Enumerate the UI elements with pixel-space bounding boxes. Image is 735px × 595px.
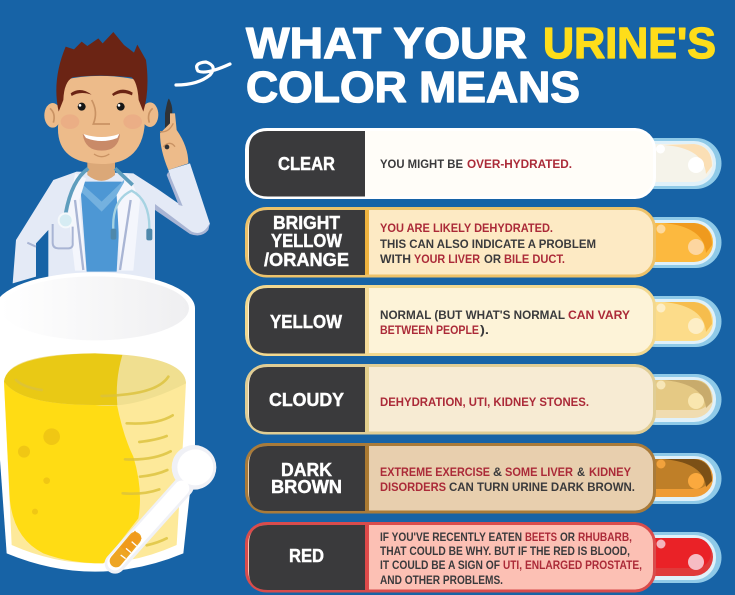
- hand and pen: [160, 99, 188, 170]
- text: yellow: ).: [480, 323, 489, 337]
- panel: red: [246, 524, 654, 591]
- cup rim: [1, 276, 189, 340]
- text: red: UTI,: [503, 558, 522, 572]
- text: red: BEETS: [525, 530, 557, 544]
- text: red: THAT COULD BE WHY. BUT IF THE RED IS BLOOD,: [380, 544, 630, 558]
- panel: clear: [246, 130, 654, 198]
- text: dark brown: [380, 465, 635, 494]
- title: [246, 19, 716, 112]
- text: bright yellow: [380, 221, 596, 266]
- capsule: red: [630, 532, 722, 583]
- text: dark brown: KIDNEY: [589, 465, 631, 479]
- capsule: cloudy: [630, 374, 722, 425]
- capsule: bright yellow: [630, 217, 722, 268]
- text: bright yellow: THIS CAN ALSO INDICATE A PROBLEM: [380, 237, 596, 251]
- mouth: [83, 134, 120, 157]
- label: bright yellow: [249, 210, 369, 275]
- hair: [56, 32, 147, 112]
- label: clear: CLEAR: [278, 153, 335, 174]
- text: bright yellow: YOU ARE LIKELY DEHYDRATED.: [380, 221, 553, 235]
- text: bright yellow: OR: [484, 252, 501, 266]
- text: clear: YOU MIGHT BE: [380, 157, 463, 171]
- text: red: IF YOU'VE RECENTLY EATEN: [380, 530, 522, 544]
- text: dark brown: CAN TURN URINE DARK BROWN.: [449, 480, 635, 494]
- panel: bright yellow / orange: [246, 208, 654, 276]
- label: clear: [249, 131, 365, 196]
- text: dark brown: EXTREME EXERCISE: [380, 465, 490, 479]
- panel: cloudy: [246, 366, 654, 433]
- text: yellow: CAN VARY: [568, 308, 630, 322]
- text: bright yellow: YOUR LIVER: [414, 252, 480, 266]
- label: yellow: YELLOW: [270, 311, 342, 332]
- text: cloudy: DEHYDRATION, UTI, KIDNEY STONES.: [380, 395, 589, 409]
- label: yellow: [249, 288, 369, 354]
- panel: yellow: [246, 286, 654, 354]
- label: bright yellow: /ORANGE: [264, 249, 349, 270]
- text: yellow: BETWEEN PEOPLE: [380, 323, 479, 337]
- face: [58, 76, 145, 164]
- label: dark brown: [249, 446, 369, 511]
- text: bright yellow: BILE DUCT.: [504, 252, 565, 266]
- eyes and brows: [71, 90, 133, 124]
- capsule: yellow: [630, 296, 722, 347]
- text: clear: OVER-HYDRATED.: [467, 157, 572, 171]
- text: yellow: [380, 308, 630, 337]
- icon: swirl: [176, 62, 230, 85]
- label: bright yellow: BRIGHT: [273, 212, 341, 233]
- label: red: RED: [289, 545, 324, 566]
- label: bright yellow: YELLOW: [271, 230, 342, 251]
- label: dark brown: BROWN: [271, 476, 342, 497]
- title: URINE'S: [543, 19, 716, 68]
- text: dark brown: &: [577, 465, 585, 479]
- cheeks: [61, 114, 142, 129]
- neck: [87, 160, 115, 181]
- title: COLOR MEANS: [246, 63, 580, 112]
- text: dark brown: SOME LIVER: [505, 465, 573, 479]
- label: cloudy: CLOUDY: [269, 389, 345, 410]
- text: red: AND OTHER PROBLEMS.: [380, 573, 503, 587]
- label: cloudy: [249, 367, 369, 432]
- text: red: OR: [560, 530, 575, 544]
- text: red: IT COULD BE A SIGN OF: [380, 558, 500, 572]
- urine liquid: [4, 353, 186, 563]
- label: dark brown: DARK: [281, 459, 333, 480]
- text: dark brown: DISORDERS: [380, 480, 446, 494]
- doctor coat and sleeves: [13, 163, 210, 283]
- stethoscope: [59, 168, 152, 240]
- doctor illustration: [13, 32, 210, 283]
- cup body: [0, 272, 195, 572]
- panel: dark brown: [246, 444, 654, 512]
- text: red: ENLARGED PROSTATE,: [525, 558, 642, 572]
- text: yellow: NORMAL (BUT WHAT'S NORMAL: [380, 308, 565, 322]
- text: dark brown: &: [493, 465, 502, 479]
- ears: [44, 102, 158, 128]
- capsule: clear: [630, 138, 722, 189]
- label: red: [249, 525, 369, 590]
- text: red: RHUBARB,: [578, 530, 632, 544]
- text: clear: [380, 157, 572, 171]
- specimen cup: [0, 272, 216, 572]
- title: WHAT YOUR: [246, 19, 527, 68]
- text: red: [380, 530, 642, 587]
- test strip: [115, 445, 216, 563]
- capsule: dark brown: [630, 453, 722, 504]
- text: bright yellow: WITH: [380, 252, 411, 266]
